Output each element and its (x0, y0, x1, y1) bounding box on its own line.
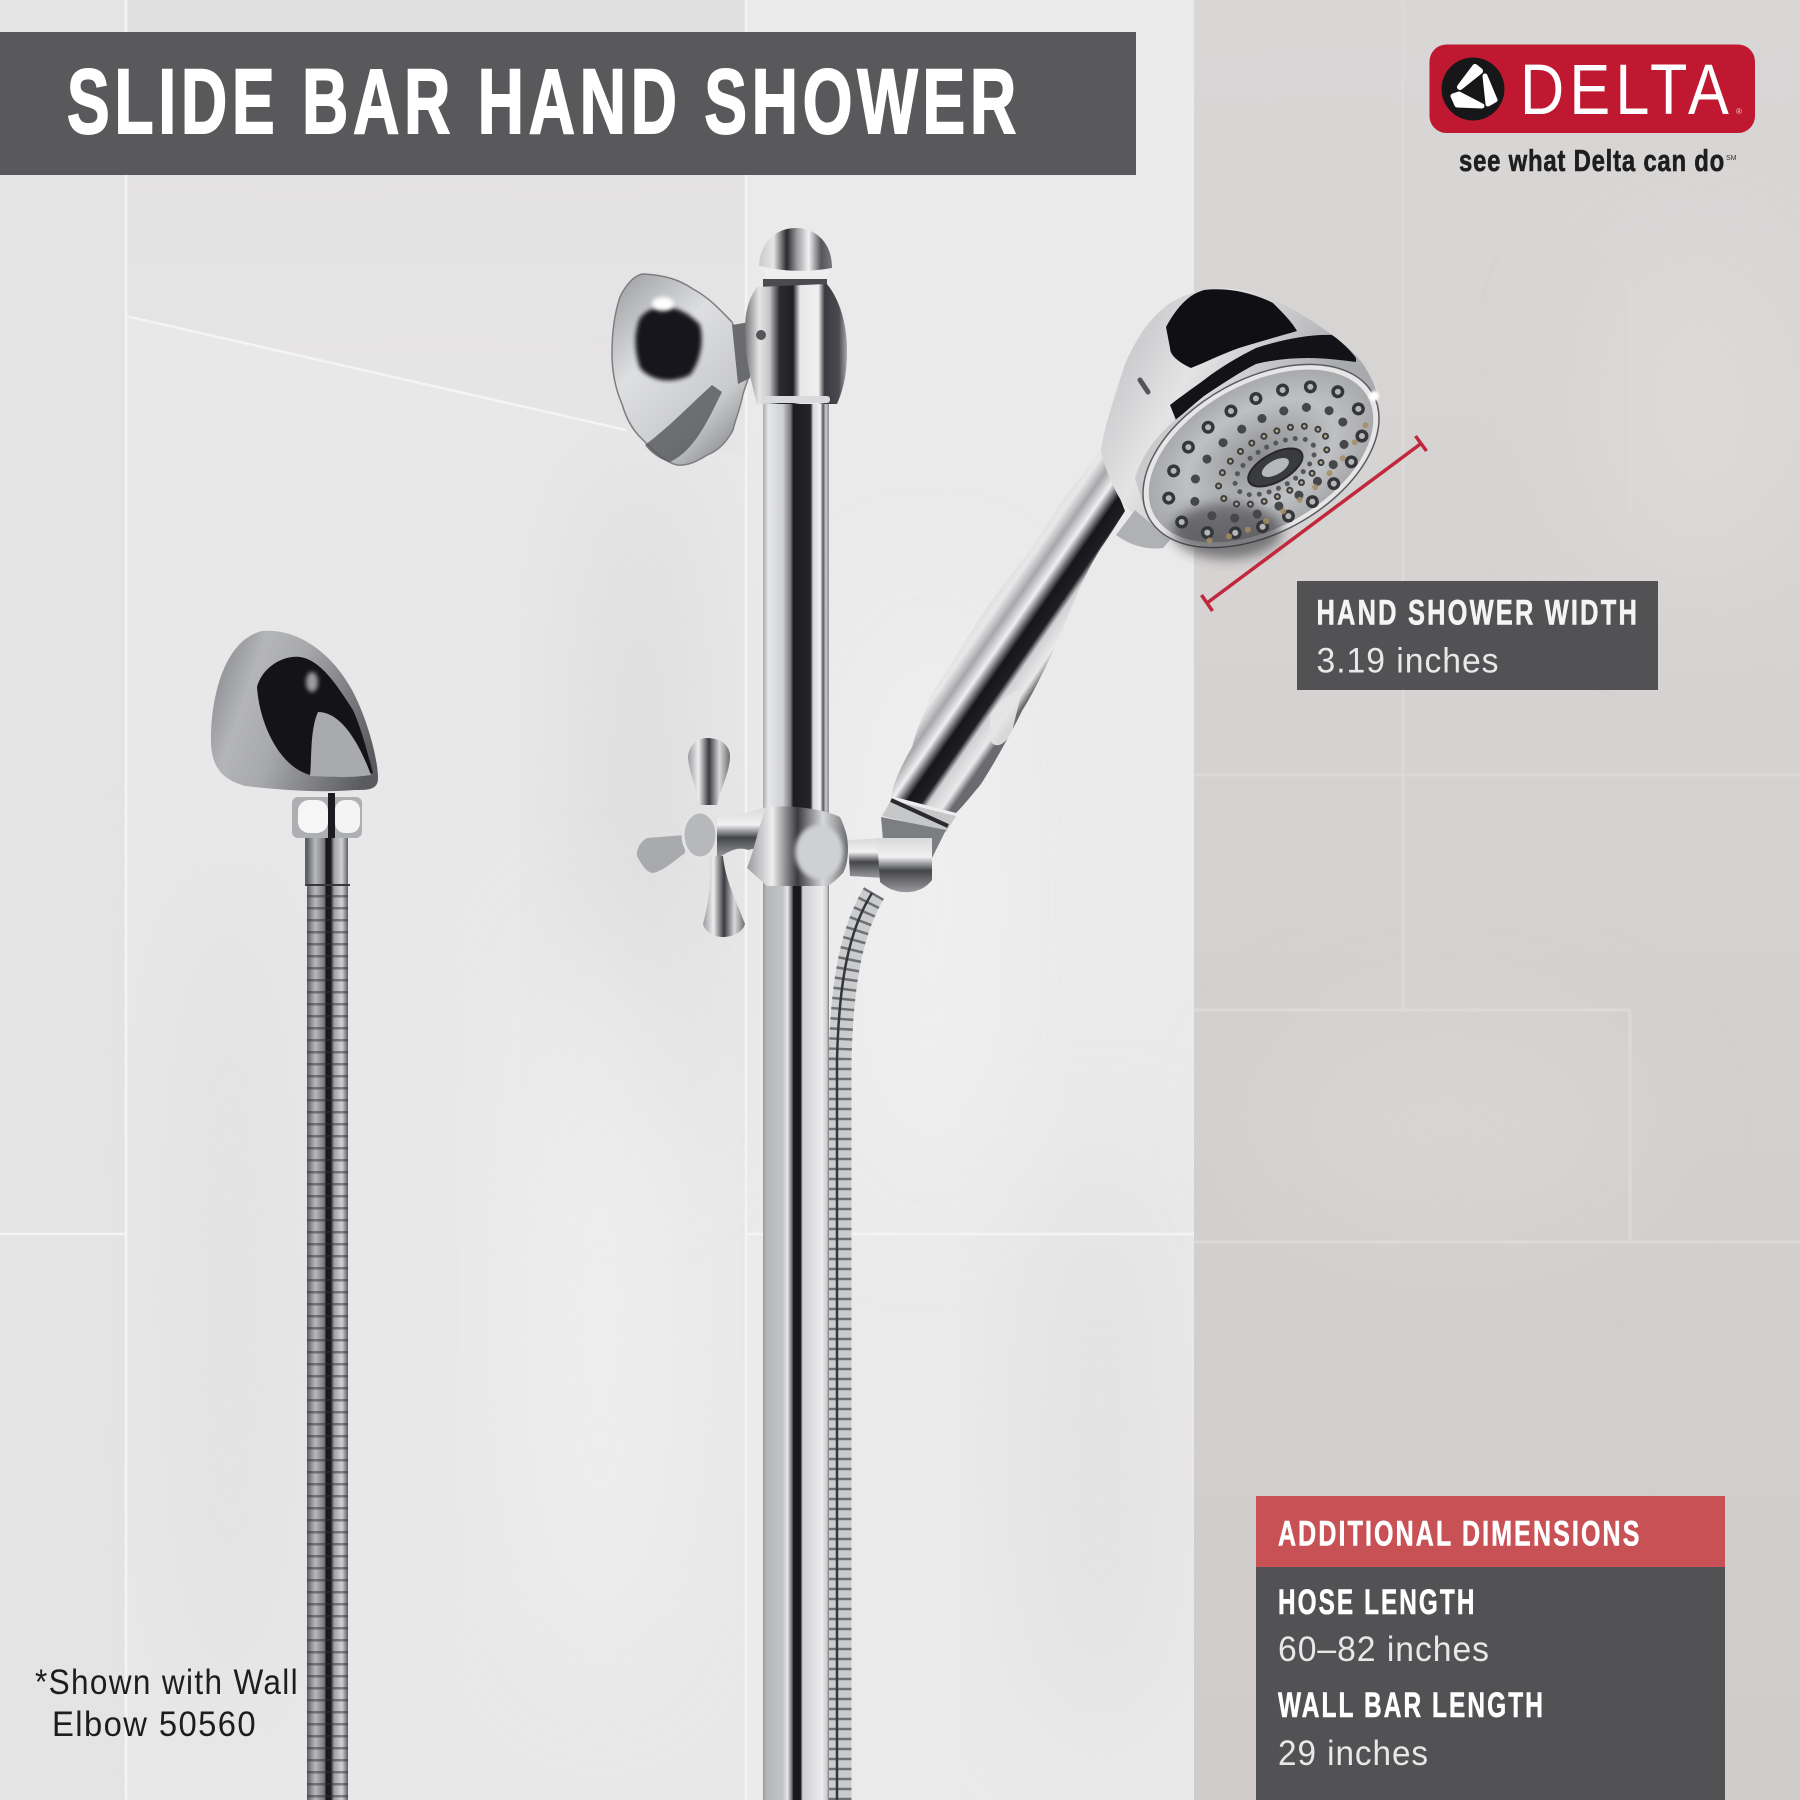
tagline: see what Delta can do (1459, 143, 1725, 178)
handle (877, 450, 1125, 892)
shower head face (1112, 327, 1422, 606)
footnote: *Shown with Wall (35, 1663, 299, 1702)
callout: hand shower width (1297, 581, 1658, 690)
elbow nut (292, 793, 362, 838)
cross handle (637, 738, 798, 937)
title: SLIDE BAR HAND SHOWER (67, 51, 1021, 153)
top knob (745, 228, 847, 404)
elbow tube (305, 838, 348, 884)
callout: hand shower width: HAND SHOWER WIDTH (1316, 594, 1639, 632)
Delta logo (1430, 44, 1755, 178)
Delta logo: SM (1726, 155, 1737, 162)
panel body: 60–82 inches (1278, 1630, 1490, 1669)
hose: left (305, 883, 350, 1800)
panel body: 29 inches (1278, 1734, 1429, 1773)
panel body: WALL BAR LENGTH (1278, 1686, 1545, 1725)
wall elbow with hose (211, 631, 378, 1800)
footnote (35, 1663, 299, 1744)
bar shaft (763, 399, 829, 1800)
icon: Delta triangle mark (1442, 58, 1504, 120)
callout: hand shower width: 3.19 inches (1316, 642, 1500, 680)
footnote: Elbow 50560 (52, 1705, 257, 1744)
title bar (0, 32, 1136, 175)
panel header: ADDITIONAL DIMENSIONS (1278, 1514, 1642, 1554)
panel body (1256, 1567, 1725, 1800)
Delta logo: ® (1736, 107, 1742, 116)
panel header (1256, 1496, 1725, 1567)
clamp (747, 806, 884, 886)
shower head back shell (1101, 288, 1376, 548)
panel body: HOSE LENGTH (1278, 1583, 1476, 1622)
elbow body (211, 631, 378, 791)
hose: right (837, 893, 874, 1800)
hand shower (877, 288, 1422, 892)
DELTA wordmark: DELTA (1520, 51, 1734, 130)
dimension line: hand shower width (1202, 436, 1426, 611)
wall flange (612, 274, 750, 465)
panel: additional dimensions (1256, 1496, 1725, 1800)
slide bar (612, 228, 884, 1800)
